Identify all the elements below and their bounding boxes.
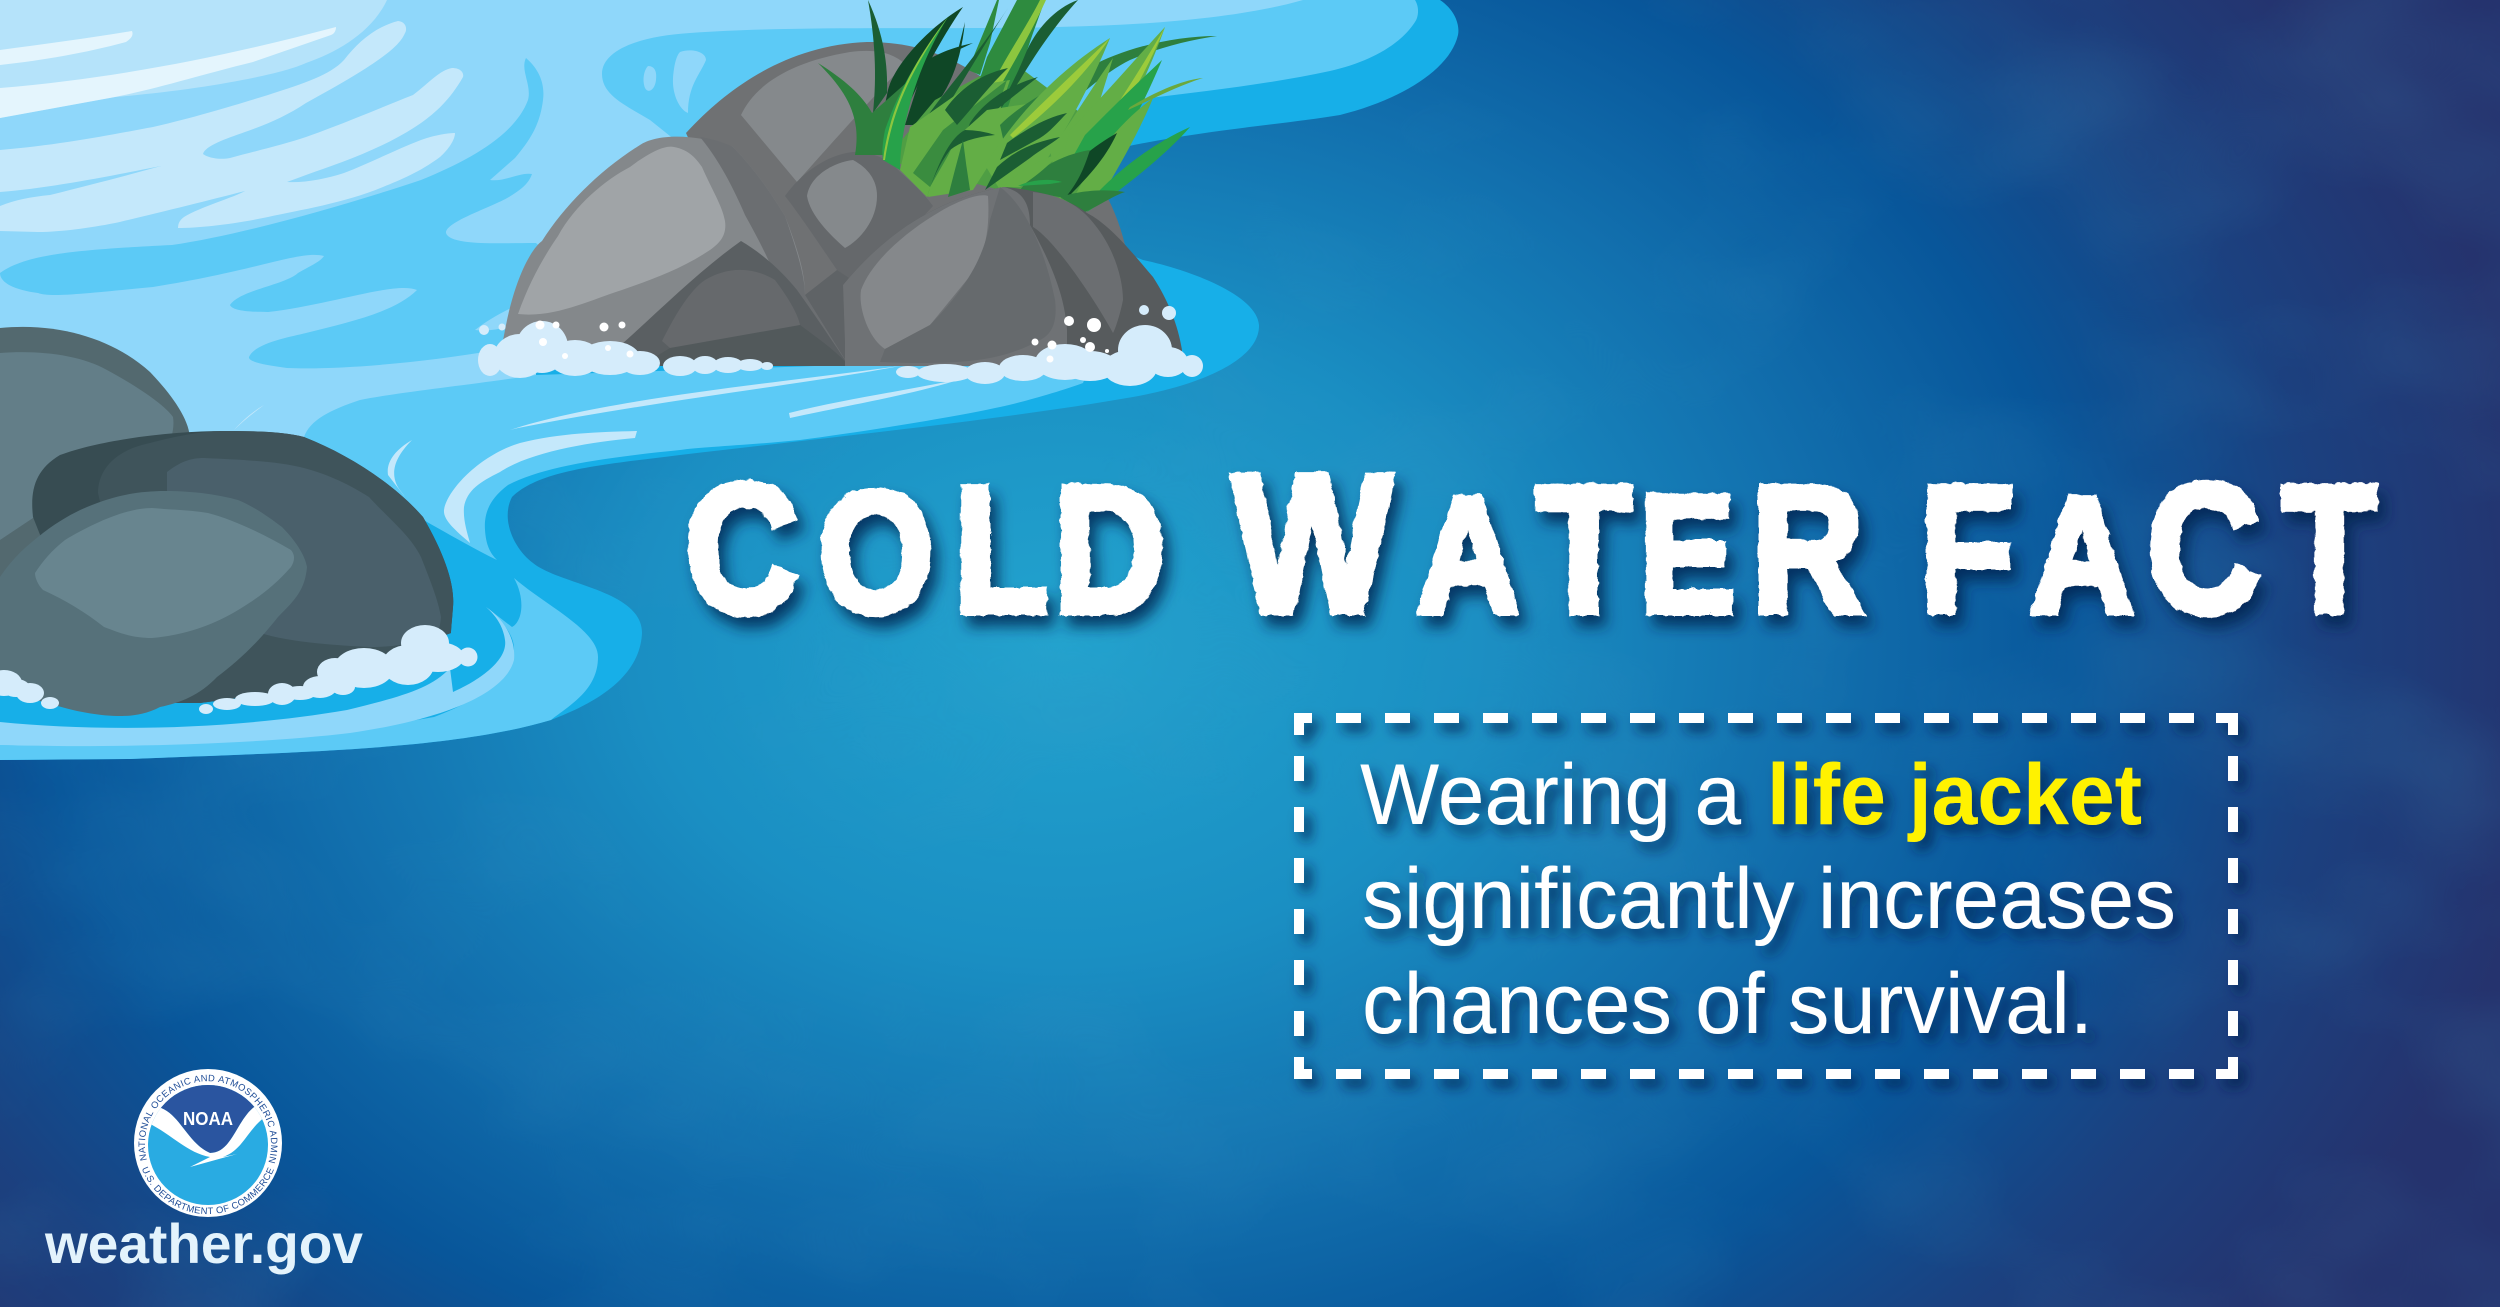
rock: front boulder — [0, 491, 307, 716]
logo: NOAA seal — [134, 1069, 282, 1217]
callout: dashed box — [1299, 718, 2233, 1074]
callout text: life jacket — [1767, 747, 2142, 843]
title: COLD WATER FACT: C — [684, 445, 797, 650]
title: COLD WATER FACT: D — [1053, 447, 1207, 649]
title: COLD WATER FACT: W — [1232, 433, 1391, 652]
title: COLD WATER FACT: T — [1535, 447, 1630, 649]
foam: left of upper rock — [478, 320, 773, 378]
rock group: upper rocks with grass — [498, 0, 1217, 366]
site label: weather.gov: weather.gov — [44, 1212, 363, 1275]
rock: base shadow — [600, 241, 849, 366]
logo: NOAA seal: U.S. DEPARTMENT OF COMMERCE — [142, 1166, 274, 1214]
title: COLD WATER FACT — [684, 433, 2375, 652]
title: COLD WATER FACT: T — [2281, 447, 2375, 649]
water: pale upper pool — [0, 0, 1303, 520]
logo: NOAA seal: NOAA — [183, 1109, 233, 1129]
foam: lower rocks — [0, 625, 478, 714]
water: streak ripple around rock — [644, 50, 706, 113]
water: outer bright edge — [0, 0, 1458, 760]
title: COLD WATER FACT: L — [953, 447, 1047, 649]
water: bright highlight streaks — [0, 27, 336, 118]
rock: back boulder — [686, 42, 1125, 366]
rock: left boulder — [498, 137, 849, 366]
callout text — [1360, 747, 2176, 1052]
title: COLD WATER FACT: A — [2030, 463, 2131, 645]
title: COLD WATER FACT: O — [817, 455, 932, 646]
water: channel mid-blue — [304, 360, 1090, 560]
water: mid-blue swirl — [0, 58, 600, 368]
title: COLD WATER FACT: F — [1919, 447, 2013, 649]
grass: tuft behind the rocks — [818, 0, 1217, 212]
callout text: significantly increases — [1362, 851, 2176, 947]
callout text: Wearing a — [1360, 747, 1741, 843]
logo: NOAA seal: NATIONAL OCEANIC AND ATMOSPHERIC ADMINISTRATION — [138, 1074, 278, 1164]
water: lower mid-blue sweep — [0, 578, 598, 760]
water: lower pale band — [0, 607, 514, 746]
water: top pale sheet — [0, 0, 387, 118]
title: COLD WATER FACT: E — [1638, 460, 1734, 645]
water: upper mid-blue sheet — [0, 0, 1418, 340]
rock: gap fill between boulders — [805, 270, 860, 366]
title: COLD WATER FACT: A — [1416, 463, 1517, 645]
rock: dark centre boulder — [32, 431, 453, 703]
rock: small middle boulder — [785, 152, 933, 285]
rock: back left boulder — [0, 327, 190, 620]
water: small swirls beside the upper rock — [475, 195, 600, 330]
title: COLD WATER FACT: C — [2146, 445, 2259, 650]
foam: right of upper rock — [896, 305, 1203, 386]
water: pale current streaks — [234, 366, 965, 543]
callout text: chances of survival. — [1362, 956, 2093, 1052]
rock group: lower-left rocks — [0, 327, 453, 716]
water: shallow river illustration — [0, 0, 1458, 760]
title: COLD WATER FACT: R — [1750, 447, 1905, 649]
water: pale ripple streaks — [0, 21, 463, 232]
rock: right boulder — [843, 187, 1182, 366]
